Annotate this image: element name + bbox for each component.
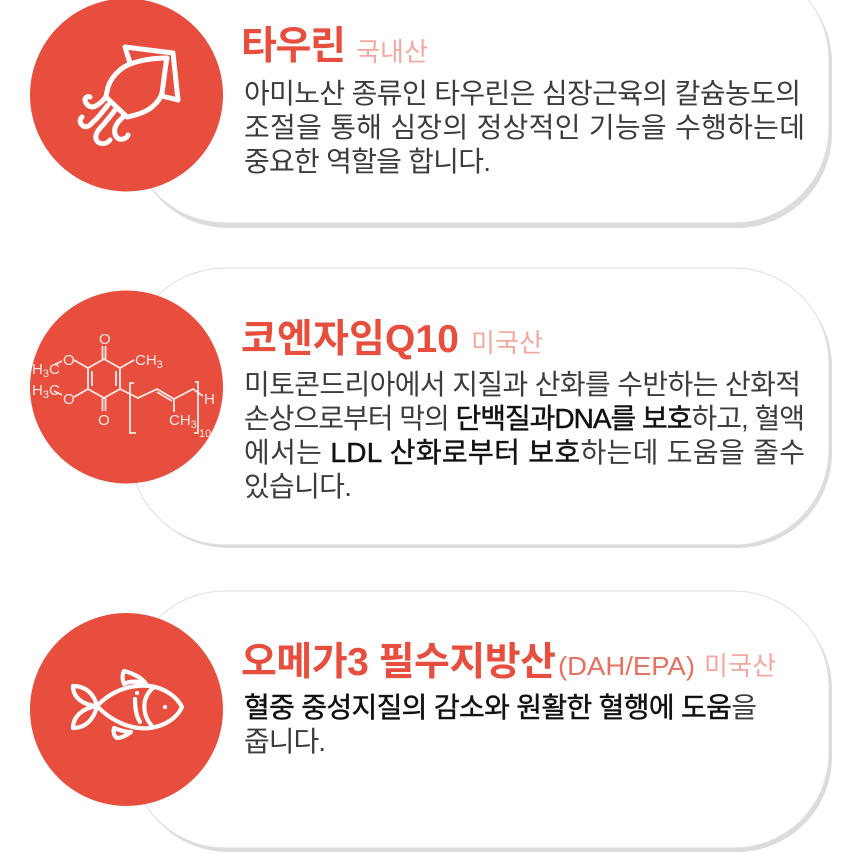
icon circle: taurine <box>30 0 223 192</box>
card shadow: omega-3 <box>133 595 832 852</box>
icon circle: coenzyme Q10 <box>30 290 223 484</box>
panel: omega-3 <box>30 591 832 852</box>
heading: coenzyme Q10: 미국산 <box>471 328 543 358</box>
heading: omega-3: 미국산 <box>704 651 776 681</box>
heading: omega-3 <box>241 641 776 684</box>
icon: molecule: O <box>98 412 110 429</box>
icon: molecule: CH <box>169 412 191 429</box>
icon: squid <box>80 47 178 144</box>
heading: omega-3: (DAH/EPA) <box>558 651 695 681</box>
text block: coenzyme Q10 <box>244 369 805 502</box>
panel: coenzyme Q10 <box>30 268 832 548</box>
card: coenzyme Q10 <box>130 268 829 545</box>
icon: molecule: 10 <box>199 428 211 440</box>
icon: molecule <box>32 331 215 440</box>
card shadow: coenzyme Q10 <box>133 272 832 548</box>
text block: taurine <box>244 78 805 177</box>
icon: molecule: C <box>49 361 60 378</box>
icon: molecule: H <box>204 391 215 408</box>
text block: coenzyme Q10: 손상으로부터 막의 단백질과DNA를 보호하고, 혈액 <box>244 403 805 434</box>
heading: taurine: 타우린 <box>241 25 346 68</box>
icon: molecule: 3 <box>43 389 49 401</box>
icon: molecule: O <box>63 352 75 369</box>
icon: molecule: H <box>32 361 43 378</box>
icon: molecule: C <box>49 382 60 399</box>
panel: taurine <box>30 0 832 228</box>
text block: omega-3: 줍니다. <box>244 726 326 757</box>
icon: molecule: 3 <box>191 419 197 431</box>
text block: taurine: 중요한 역할을 합니다. <box>244 146 491 177</box>
icon: molecule: CH <box>135 352 157 369</box>
text block: omega-3 <box>244 692 757 757</box>
icon: molecule: O <box>63 391 75 408</box>
heading: taurine: 국내산 <box>356 37 428 67</box>
icon: fish <box>73 671 182 738</box>
icon: molecule: H <box>32 382 43 399</box>
text block: omega-3: 혈중 중성지질의 감소와 원활한 혈행에 도움을 <box>244 692 757 723</box>
text block: coenzyme Q10: 있습니다. <box>244 471 352 502</box>
icon: molecule: O <box>99 331 111 348</box>
text block: coenzyme Q10: 미토콘드리아에서 지질과 산화를 수반하는 산화적 <box>244 369 801 400</box>
text block: taurine: 아미노산 종류인 타우린은 심장근육의 칼슘농도의 <box>244 78 801 109</box>
text block: coenzyme Q10: 에서는 LDL 산화로부터 보호하는데 도움을 줄수 <box>244 437 805 468</box>
icon: molecule: 3 <box>43 368 49 380</box>
card: taurine <box>130 0 829 223</box>
heading: taurine <box>241 25 428 68</box>
icon: molecule: 3 <box>157 359 163 371</box>
card shadow: taurine <box>133 0 832 228</box>
heading: omega-3: 오메가3 필수지방산 <box>241 641 556 684</box>
icon circle: omega-3 <box>30 613 223 806</box>
heading: coenzyme Q10: 코엔자임Q10 <box>241 318 459 361</box>
card: omega-3 <box>130 591 829 848</box>
text block: taurine: 조절을 통해 심장의 정상적인 기능을 수행하는데 <box>244 112 805 143</box>
